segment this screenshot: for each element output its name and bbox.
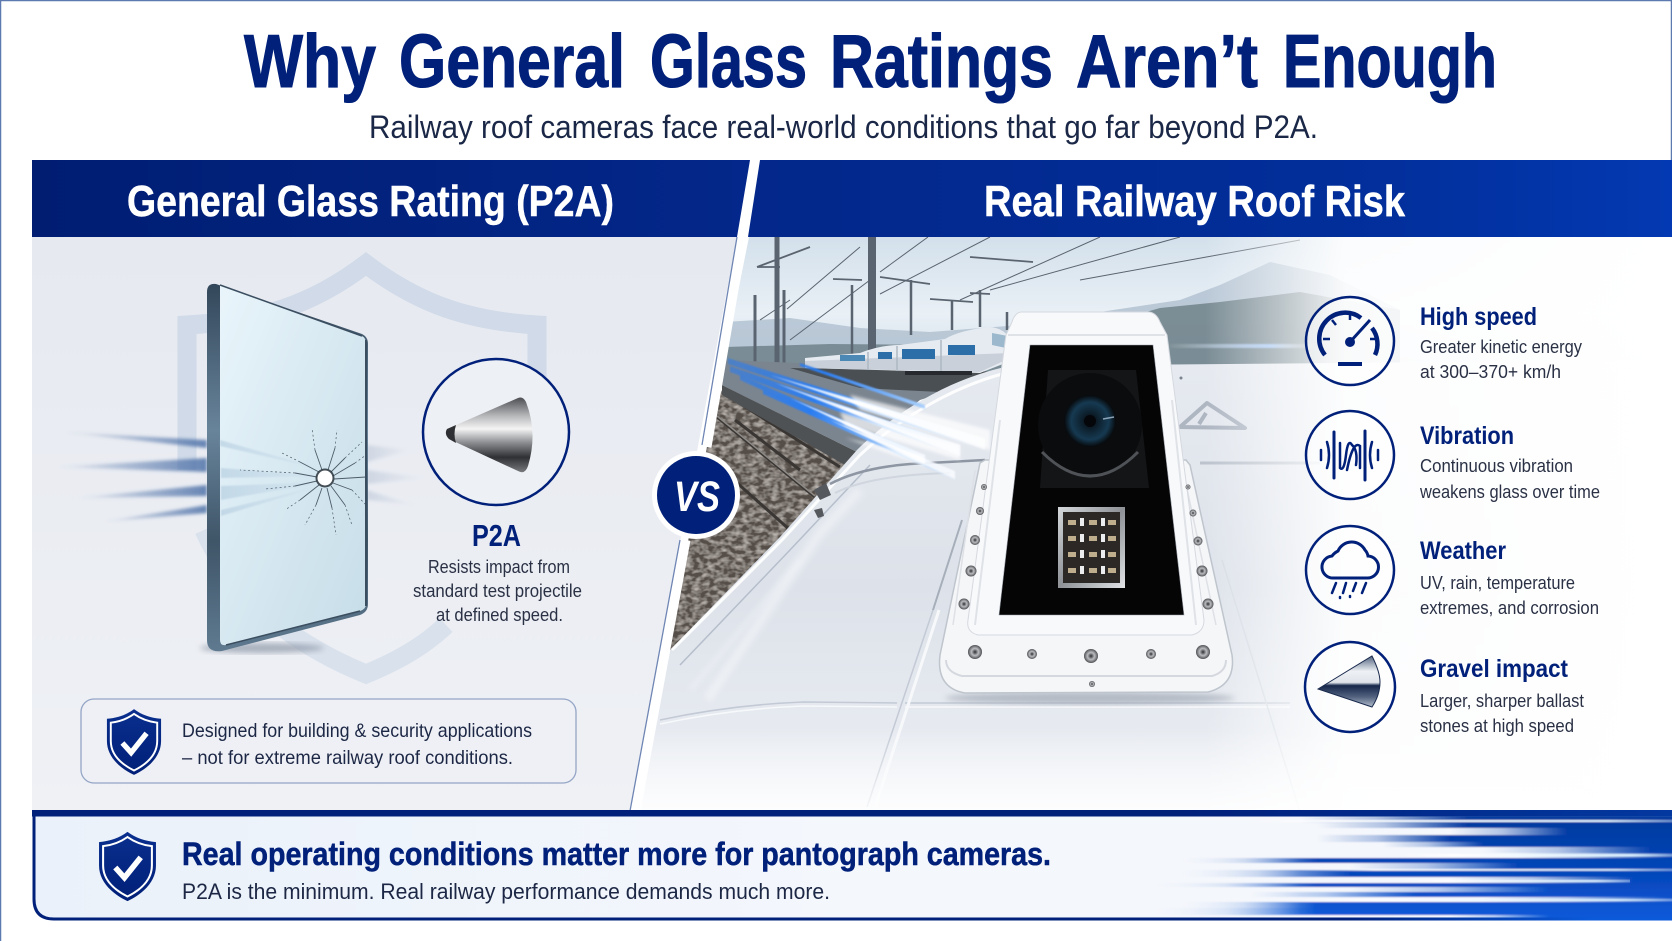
fading streak tips	[1150, 816, 1672, 920]
P2A description: Resists impact from	[428, 557, 570, 577]
roof gloss	[672, 372, 1010, 700]
icon: banner shield	[99, 832, 156, 901]
crack lines	[240, 428, 366, 535]
roof ribs and panel seams	[660, 460, 1320, 812]
track rails	[716, 392, 841, 529]
high speed text: High speed	[1420, 303, 1537, 331]
note box	[81, 699, 576, 783]
glass pane with crack	[207, 284, 368, 651]
note text: Designed for building & security applications	[182, 720, 532, 742]
left fade over streaks	[1160, 858, 1296, 916]
risk list	[1305, 297, 1600, 736]
title: Aren’t	[1076, 19, 1258, 103]
title: General	[399, 19, 625, 103]
VS badge: VS	[674, 473, 720, 521]
header: general glass rating: General Glass Rating (P2A)	[127, 177, 614, 226]
gravel and tracks	[670, 390, 844, 650]
VS badge	[652, 451, 740, 539]
title	[244, 19, 1497, 103]
banner border	[34, 813, 1672, 919]
icon: speedometer	[1306, 297, 1394, 385]
title: Ratings	[830, 19, 1053, 103]
right speed streak	[1165, 344, 1315, 348]
risk: weather	[1306, 526, 1599, 618]
risk: vibration	[1306, 411, 1600, 502]
weather text: Weather	[1420, 537, 1506, 565]
risk: gravel impact: stones at high speed	[1420, 716, 1574, 736]
P2A description: at defined speed.	[436, 605, 563, 625]
P2A description: standard test projectile	[413, 581, 582, 601]
icon: P2A projectile circle	[423, 359, 569, 505]
subtitle: Railway roof cameras face real-world conditions that go far beyond P2A.	[369, 109, 1318, 145]
sky	[733, 237, 1332, 332]
solid pale runs left of each streak	[1150, 816, 1517, 920]
title: Enough	[1283, 19, 1497, 103]
catenary poles and wires	[754, 237, 1300, 362]
banner speed streaks	[1194, 816, 1672, 918]
note text	[182, 720, 532, 769]
speed streaks	[728, 358, 990, 480]
mounting flange	[940, 460, 1232, 693]
black glass window	[999, 345, 1184, 615]
fade to white	[1205, 237, 1672, 812]
train roof	[646, 362, 1400, 782]
risk: vibration: Continuous vibration	[1420, 456, 1573, 476]
trackside bed	[722, 361, 938, 452]
risk: weather: UV, rain, temperature	[1420, 573, 1575, 593]
risk: vibration: weakens glass over time	[1419, 482, 1600, 502]
header: real railway roof risk: Real Railway Roof Risk	[984, 177, 1405, 226]
bottom banner	[32, 810, 1672, 920]
left panel background	[32, 237, 737, 811]
panel: real railway roof photo	[620, 237, 1672, 815]
risk: weather: extremes, and corrosion	[1420, 598, 1599, 618]
P2A description	[413, 557, 582, 625]
bright thin lines	[1250, 820, 1672, 901]
risk: high speed	[1306, 297, 1582, 385]
gravel impact text: Gravel impact	[1420, 655, 1569, 683]
LED module	[1058, 507, 1125, 588]
icon: shield check	[107, 709, 161, 775]
panel: general glass rating	[32, 237, 737, 811]
mounting bolts	[958, 484, 1214, 687]
impact streaks	[55, 432, 425, 522]
icon: vibration wave	[1306, 411, 1394, 499]
camera lens	[1038, 373, 1142, 477]
banner heading: Real operating conditions matter more for pantograph cameras.	[182, 836, 1051, 872]
camera shadow	[945, 692, 1235, 704]
risk: high speed: Greater kinetic energy	[1420, 337, 1582, 357]
icon: rain cloud	[1306, 526, 1394, 614]
glass streaks	[220, 440, 325, 516]
divider line	[630, 237, 737, 811]
header: real railway roof risk	[748, 160, 1672, 237]
note text: – not for extreme railway roof conditions.	[182, 747, 513, 769]
risk: gravel impact	[1305, 642, 1584, 736]
header: general glass rating	[32, 160, 750, 237]
risk: high speed: at 300–370+ km/h	[1420, 362, 1561, 382]
roof fittings	[814, 483, 831, 518]
banner subtext: P2A is the minimum. Real railway performance demands much more.	[182, 879, 830, 904]
camera unit	[940, 312, 1235, 704]
high speed train	[805, 327, 1012, 373]
icon: gravel cone	[1305, 642, 1395, 732]
pane shadow	[200, 643, 324, 653]
background shield watermark	[187, 264, 537, 674]
title: Glass	[650, 19, 807, 103]
vibration text: Vibration	[1420, 422, 1514, 450]
camera housing	[968, 312, 1204, 635]
distant hills	[728, 262, 1330, 354]
P2A label: P2A	[472, 518, 521, 553]
title: Why	[244, 19, 376, 103]
roof warning triangle	[1180, 403, 1245, 428]
risk: gravel impact: Larger, sharper ballast	[1420, 691, 1584, 711]
